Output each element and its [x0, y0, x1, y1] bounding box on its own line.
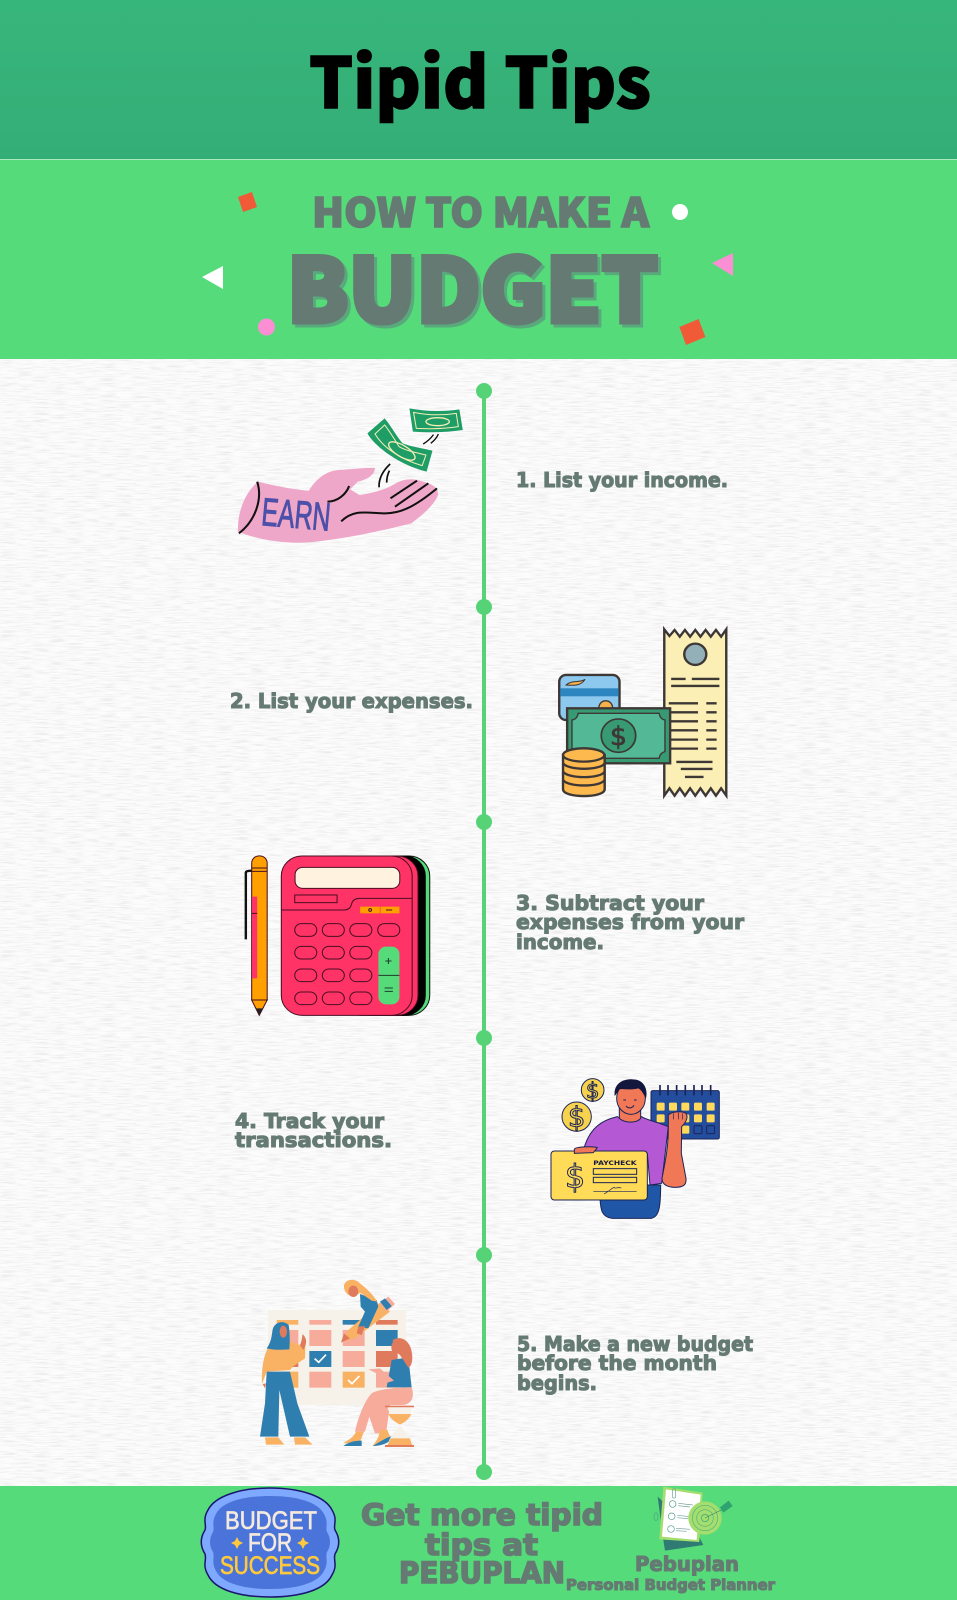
icon: clipboard with target: [654, 1487, 733, 1551]
call to action text: Get more tipid: [361, 1498, 603, 1532]
icon: man with paycheck and calendar: [551, 1079, 719, 1218]
icon: calculator and pen: [246, 856, 430, 1015]
confetti shapes: [202, 192, 733, 345]
call to action text: tips at: [425, 1528, 538, 1562]
step 1 text: 1. List your income.: [516, 468, 728, 492]
icon: man with paycheck and calendar: $: [565, 1157, 585, 1195]
call to action text: [361, 1498, 603, 1590]
badge: budget for success: BUDGET: [225, 1507, 317, 1535]
step 4 text: transactions.: [235, 1128, 392, 1152]
panel: title header: [0, 0, 957, 160]
icon: man with paycheck and calendar: $: [568, 1103, 585, 1134]
brand tagline: Personal Budget Planner: [566, 1576, 776, 1594]
badge: budget for success: [201, 1488, 339, 1597]
icon: receipt, card, banknote and coins: [559, 629, 726, 796]
call to action text: PEBUPLAN: [399, 1556, 565, 1590]
heading: how to make a: HOW TO MAKE A: [312, 181, 650, 239]
icon: earn hand with money: EARN: [260, 491, 332, 540]
panel: how to make a budget banner: [0, 160, 957, 359]
background: textured paper: [0, 359, 957, 1487]
icon: man with paycheck and calendar: PAYCHECK: [593, 1160, 637, 1167]
step 2 text: 2. List your expenses.: [230, 689, 473, 713]
icon: man with paycheck and calendar: $: [586, 1079, 599, 1104]
step 5 text: 5. Make a new budget: [517, 1332, 753, 1356]
step 5 text: begins.: [517, 1371, 597, 1395]
step 4 text: 4. Track your: [235, 1109, 384, 1133]
step 5 text: before the month: [517, 1351, 717, 1375]
badge: budget for success: FOR: [248, 1529, 292, 1557]
step 3 text: income.: [516, 930, 604, 954]
timeline: [476, 383, 492, 1480]
step 3 text: 3. Subtract your: [516, 891, 704, 915]
step 5 text: [517, 1332, 753, 1395]
icon: receipt, card, banknote and coins: $: [610, 721, 627, 752]
step 3 text: [516, 891, 744, 954]
step 4 text: [235, 1109, 392, 1152]
icon: earn hand with money: [238, 408, 463, 543]
heading: budget: BUDGET: [290, 224, 661, 351]
step 3 text: expenses from your: [516, 910, 744, 934]
brand name: Pebuplan: [635, 1552, 739, 1576]
title: Tipid Tips: [309, 28, 651, 129]
icon: women planning on calendar: [260, 1280, 414, 1447]
badge: budget for success: SUCCESS: [220, 1552, 320, 1580]
heading: budget: BUDGET: [287, 221, 658, 348]
panel: footer: [0, 1486, 957, 1600]
